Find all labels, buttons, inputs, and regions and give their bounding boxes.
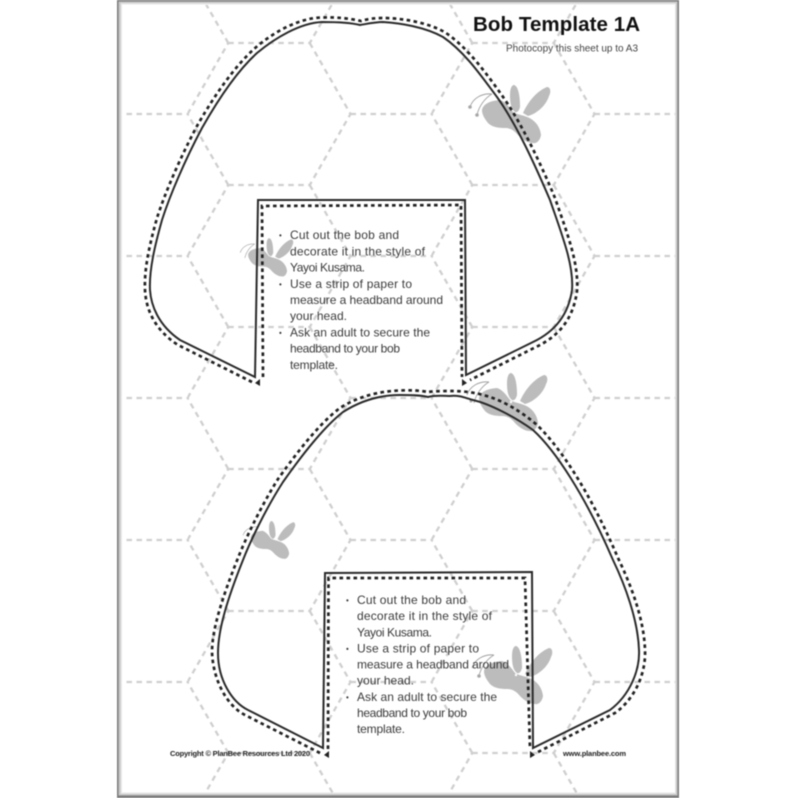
copyright footer: Copyright © PlanBee Resources Ltd 2020	[170, 749, 310, 758]
instructions: top bob: Yayoi Kusama.	[290, 261, 365, 275]
fold line: top bob	[145, 17, 577, 382]
bee: top right	[468, 85, 550, 143]
bee: lower right	[472, 646, 552, 704]
cut line: top bob	[150, 22, 572, 377]
bob template: top	[145, 17, 577, 386]
honeycomb background	[122, 5, 675, 793]
instructions: bottom bob: •	[346, 644, 349, 654]
instructions: bottom bob: Cut out the bob and	[357, 593, 466, 607]
instructions: top bob: measure a headband around	[290, 293, 443, 307]
instructions: top bob: Ask an adult to secure the	[290, 326, 430, 340]
instructions: top bob: •	[279, 231, 282, 240]
instructions: top bob: decorate it in the style of	[290, 244, 426, 258]
instructions: bottom bob: measure a headband around	[357, 658, 509, 672]
instructions: top bob: your head.	[290, 309, 347, 323]
instructions: bottom bob: Use a strip of paper to	[357, 642, 479, 656]
instructions: bottom bob: Yayoi Kusama.	[357, 625, 432, 639]
instructions: top bob: Cut out the bob and	[290, 228, 399, 242]
instructions: top bob: •	[279, 328, 282, 338]
subtitle: Photocopy this sheet up to A3	[506, 44, 638, 54]
instructions: bottom bob: template.	[357, 722, 405, 736]
instructions: bottom bob: Ask an adult to secure the	[357, 690, 497, 704]
instructions: top bob: template.	[290, 358, 338, 372]
instructions: bottom bob: •	[346, 596, 349, 605]
bee: lower left	[243, 521, 295, 559]
bee: top left	[240, 238, 293, 277]
instructions: top bob	[279, 228, 443, 372]
instructions: bottom bob	[346, 593, 509, 736]
instructions: bottom bob: your head.	[357, 674, 414, 688]
website footer: www.planbee.com	[562, 749, 626, 758]
instructions: bottom bob: decorate it in the style of	[357, 609, 493, 623]
bee: middle right	[467, 373, 547, 431]
instructions: bottom bob: •	[346, 693, 349, 702]
instructions: bottom bob: headband to your bob	[357, 706, 467, 720]
fold line: bottom bob	[212, 390, 645, 753]
instructions: top bob: headband to your bob	[290, 342, 400, 356]
arrowheads: bottom bob	[324, 751, 535, 758]
instructions: top bob: •	[279, 280, 282, 289]
instructions: top bob: Use a strip of paper to	[290, 277, 412, 291]
cut line: bottom bob	[218, 395, 639, 748]
page frame	[117, 0, 679, 798]
bob template: bottom	[212, 390, 645, 758]
title: Bob Template 1A	[473, 13, 640, 36]
arrowheads: top bob	[255, 379, 467, 386]
